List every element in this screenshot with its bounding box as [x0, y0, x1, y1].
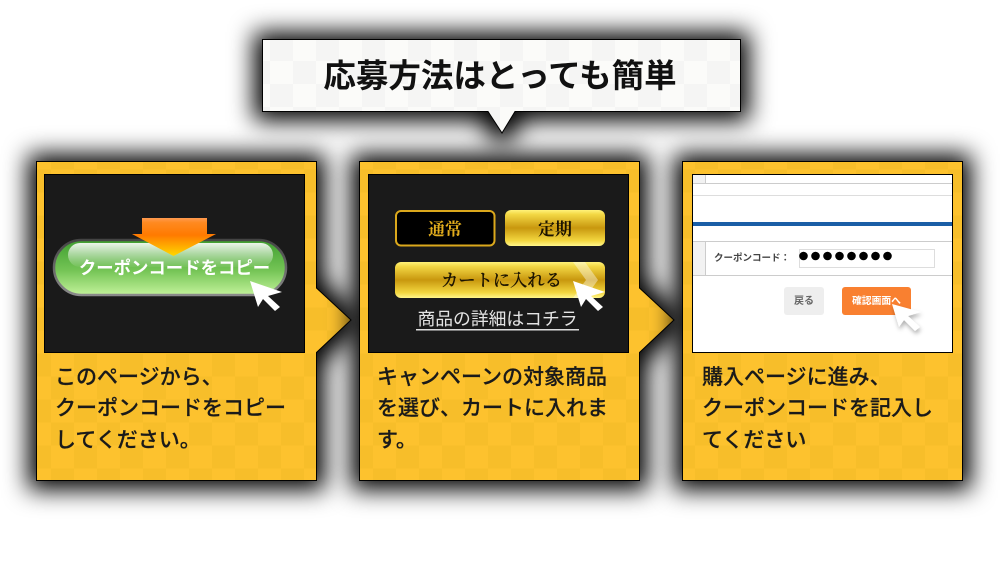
screenshot: product buttons — [368, 174, 628, 352]
green copy button — [54, 240, 286, 295]
screenshot: coupon copy button — [44, 174, 304, 352]
button: add to cart: カートに入れる — [441, 271, 562, 290]
step 3 text: クーポンコードを記入し — [702, 397, 933, 420]
step 3 text: てください — [702, 429, 806, 452]
step 2 text: す。 — [377, 429, 417, 452]
step 1 text: してください。 — [55, 429, 201, 452]
icon: cursor — [892, 304, 921, 331]
button: confirm: 確認画面へ — [852, 294, 901, 307]
step 2 text: キャンペーンの対象商品 — [377, 366, 607, 389]
button: regular — [396, 211, 494, 246]
panel: step 2 add to cart — [360, 162, 674, 480]
button: subscription: 定期 — [538, 219, 572, 239]
button: add to cart — [395, 262, 605, 298]
button: back — [784, 287, 824, 315]
button: regular: 通常 — [428, 219, 462, 239]
icon: orange down arrow — [132, 218, 216, 256]
icon: cursor — [250, 281, 282, 311]
product details link: 商品の詳細はコチラ — [417, 309, 578, 329]
step 3 text: 購入ページに進み、 — [702, 366, 891, 389]
button: subscription — [505, 210, 605, 246]
step 1 text: クーポンコードをコピー — [55, 397, 286, 420]
step 2 text: を選び、カートに入れま — [377, 397, 608, 420]
screenshot: checkout form — [692, 174, 952, 352]
heading callout — [262, 40, 740, 133]
button: back: 戻る — [794, 295, 814, 307]
icon: cursor — [573, 281, 605, 311]
green copy button: クーポンコードをコピー — [79, 258, 270, 278]
button: confirm — [842, 287, 911, 315]
heading callout: 応募方法はとっても簡単 — [323, 58, 677, 94]
coupon code field: クーポンコード： — [714, 253, 790, 264]
panel: step 1 copy coupon code — [36, 162, 351, 480]
step 1 text: このページから、 — [55, 366, 223, 389]
panel: step 3 enter coupon — [682, 162, 962, 480]
coupon code field — [714, 250, 934, 268]
